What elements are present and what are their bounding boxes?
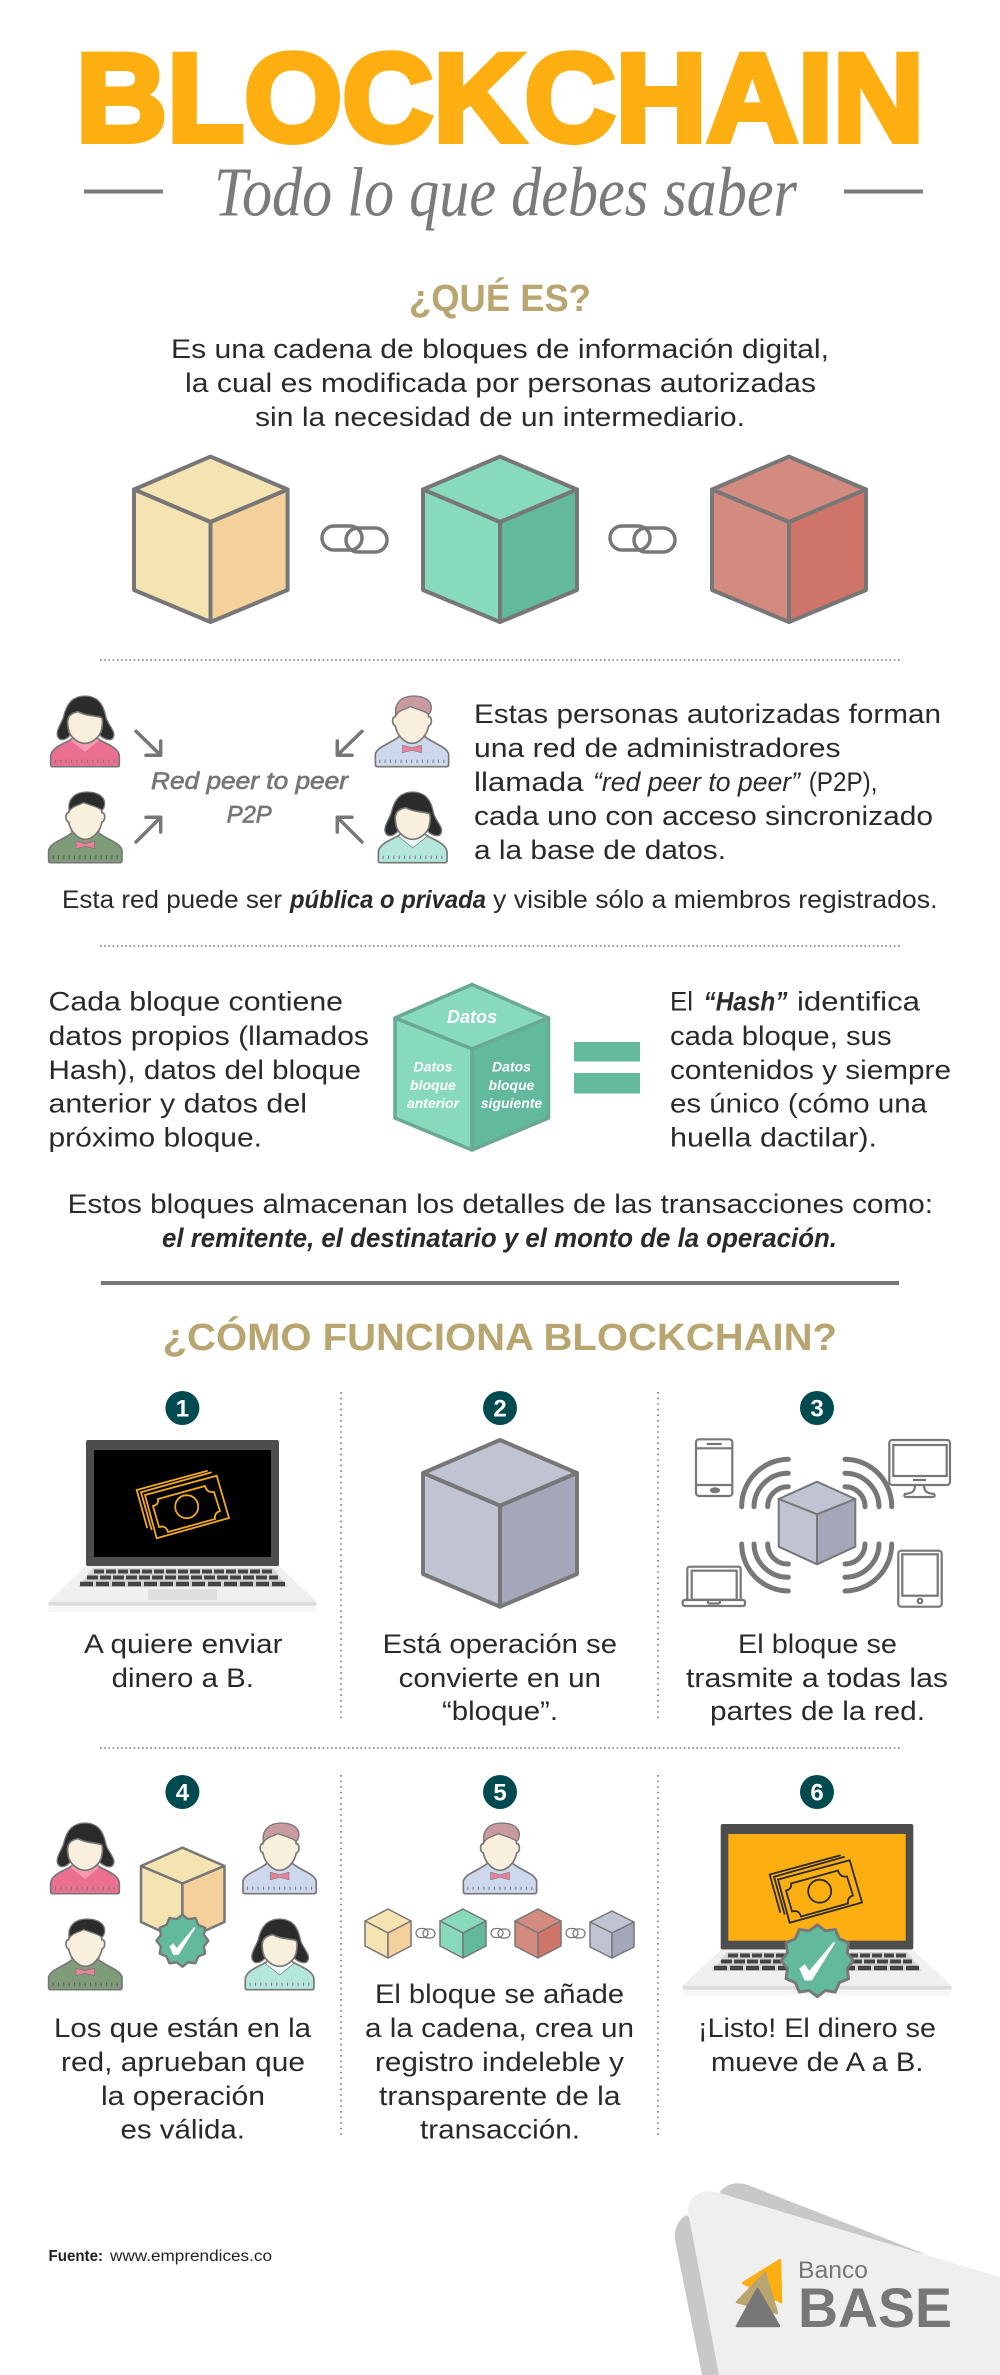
heading: que es: ¿QUÉ ES? <box>409 276 591 320</box>
icon: equals sign <box>574 1042 640 1094</box>
phone <box>696 1439 732 1496</box>
caption: red, aprueban que <box>61 2047 305 2077</box>
caption: la operación <box>101 2081 265 2111</box>
caption: A quiere enviar <box>84 1629 282 1659</box>
source note: www.emprendices.co <box>109 2248 272 2265</box>
number 6 <box>800 1775 834 1809</box>
number 5: 5 <box>493 1780 507 1806</box>
text block: public or private network: pública o privada <box>289 886 486 914</box>
text block: definition: la cual es modificada por personas autorizadas <box>185 368 816 398</box>
number 3: 3 <box>810 1396 824 1422</box>
number 5 <box>483 1775 517 1809</box>
caption: convierte en un <box>399 1663 601 1693</box>
text block: public or private network: y visible sólo a miembros registrados. <box>493 886 938 914</box>
caption <box>698 2013 936 2077</box>
icon: cube broadcasting to devices <box>683 1439 950 1607</box>
icon: chain of four mini cubes <box>365 1909 634 1958</box>
panel: step 3 <box>683 1391 950 1726</box>
text block: block contents: anterior y datos del <box>48 1088 307 1118</box>
text block: hash explanation: El <box>670 987 693 1017</box>
icon: yellow cube <box>141 1848 224 1941</box>
laptop small <box>683 1567 745 1606</box>
text block: hash explanation <box>670 987 951 1152</box>
text block: definition <box>171 334 829 432</box>
text block: p2p explanation: llamada <box>474 767 585 797</box>
text block: block contents: próximo bloque. <box>48 1122 262 1152</box>
title: BLOCKCHAIN <box>76 29 924 168</box>
text block: hash explanation: identifica <box>797 987 921 1017</box>
icon: data cube: siguiente <box>481 1095 542 1111</box>
text block: hash explanation: huella dactilar). <box>670 1122 877 1152</box>
text block: transaction details: Estos bloques almacenan los detalles de las transacciones como: <box>68 1189 933 1219</box>
icon: man green <box>49 792 122 863</box>
icon: data cube: Datos <box>447 1007 497 1027</box>
caption: es válida. <box>120 2115 245 2145</box>
icon: data cube: Datos <box>492 1059 531 1075</box>
caption: transacción. <box>420 2115 580 2145</box>
icon: woman teal <box>378 792 447 863</box>
logo wordmark: Banco <box>798 2257 868 2284</box>
icon: grey cube <box>423 1440 577 1607</box>
icon: data cube: Datos <box>414 1059 453 1075</box>
caption <box>54 2013 312 2145</box>
text block: definition: sin la necesidad de un intermediario. <box>255 402 745 432</box>
signal waves <box>742 1459 892 1591</box>
icon: data cube: bloque <box>489 1077 535 1093</box>
text block: transaction details <box>68 1189 933 1253</box>
text block: definition: Es una cadena de bloques de información digital, <box>171 334 829 364</box>
caption: partes de la red. <box>710 1696 925 1726</box>
small cube <box>779 1482 855 1564</box>
number 4 <box>165 1775 199 1809</box>
number 1 <box>165 1391 199 1425</box>
icon: woman pink <box>51 1823 119 1894</box>
caption: trasmite a todas las <box>686 1663 948 1693</box>
caption: transparente de la <box>379 2081 622 2111</box>
caption: mueve de A a B. <box>711 2047 924 2077</box>
caption: El bloque se añade <box>375 1979 624 2009</box>
icon: green cube <box>423 457 577 622</box>
text block: transaction details: el remitente, el destinatario y el monto de la operación. <box>162 1223 837 1253</box>
number 2 <box>483 1391 517 1425</box>
caption <box>686 1629 948 1726</box>
icon: yellow cube <box>134 457 288 622</box>
heading: como funciona: ¿CÓMO FUNCIONA BLOCKCHAIN? <box>163 1315 837 1359</box>
text block: p2p explanation <box>474 699 941 865</box>
number 6: 6 <box>810 1780 824 1806</box>
icon: banknotes <box>770 1855 862 1923</box>
icon: woman teal <box>245 1919 314 1990</box>
caption: a la cadena, crea un <box>365 2013 634 2043</box>
icon: approval badge <box>781 1925 853 1997</box>
text block: hash explanation: “Hash” <box>704 987 788 1017</box>
icon: data cube: anterior <box>407 1095 461 1111</box>
number 3 <box>800 1391 834 1425</box>
source note <box>48 2248 272 2265</box>
panel: step 5 <box>365 1775 634 2145</box>
caption: El bloque se <box>738 1629 897 1659</box>
text block: hash explanation: contenidos y siempre <box>670 1055 951 1085</box>
text block: p2p explanation: cada uno con acceso sincronizado <box>474 801 933 831</box>
logo corner: banco base <box>675 2183 1000 2375</box>
text block: public or private network <box>62 886 938 914</box>
text block: block contents: datos propios (llamados <box>48 1021 369 1051</box>
icon: logo triangles <box>737 2260 781 2326</box>
text block: p2p explanation: (P2P), <box>809 767 878 797</box>
caption: “bloque”. <box>442 1696 558 1726</box>
caption: ¡Listo! El dinero se <box>698 2013 936 2043</box>
icon: man blue <box>375 696 449 767</box>
subtitle with side rules: Todo lo que debes saber <box>214 154 798 232</box>
icon: woman pink <box>51 696 119 767</box>
icon: laptop with money and check badge <box>682 1824 952 1997</box>
text block: block contents: Hash), datos del bloque <box>48 1055 361 1085</box>
text block: hash explanation: cada bloque, sus <box>670 1021 892 1051</box>
number 2: 2 <box>493 1396 507 1422</box>
icon: man blue <box>463 1823 537 1894</box>
text block: block contents: Cada bloque contiene <box>48 987 343 1017</box>
label: red peer to peer: Red peer to peer <box>151 768 349 795</box>
caption: Está operación se <box>383 1629 617 1659</box>
text block: hash explanation: es único (cómo una <box>670 1088 928 1118</box>
icon: man green <box>49 1919 122 1990</box>
arrows toward the network label <box>136 731 362 842</box>
monitor <box>889 1440 950 1497</box>
icon: red cube <box>712 457 866 622</box>
text block: p2p explanation: Estas personas autorizadas forman <box>474 699 941 729</box>
caption <box>84 1629 282 1693</box>
caption: registro indeleble y <box>375 2047 625 2077</box>
text block: block contents <box>48 987 369 1152</box>
label: red peer to peer: P2P <box>227 802 272 829</box>
panel: step 6 <box>682 1775 952 2077</box>
text block: p2p explanation: a la base de datos. <box>474 835 726 865</box>
text block: p2p explanation: “red peer to peer” <box>593 767 801 797</box>
tablet <box>898 1551 942 1607</box>
panel: step 1 <box>48 1391 317 1693</box>
icon: data cube: bloque <box>410 1077 456 1093</box>
icon: laptop with money <box>48 1440 317 1612</box>
caption <box>365 1979 634 2145</box>
label: red peer to peer <box>151 768 349 829</box>
icon: data cube <box>395 984 548 1150</box>
peer to peer network diagram <box>49 696 449 863</box>
icon: man blue <box>243 1823 316 1894</box>
number 1: 1 <box>176 1396 189 1422</box>
source note: Fuente: <box>48 2248 103 2265</box>
chain of three cubes <box>134 457 866 622</box>
icon: chain link 2 <box>610 526 675 552</box>
panel: step 2 <box>383 1391 617 1726</box>
caption <box>383 1629 617 1726</box>
logo wordmark: BASE <box>798 2276 952 2339</box>
icon: approval badge <box>156 1915 208 1967</box>
icon: chain link 1 <box>322 526 387 552</box>
caption: Los que están en la <box>54 2013 312 2043</box>
number 4: 4 <box>176 1780 190 1806</box>
icon: banknotes <box>137 1471 229 1538</box>
text block: public or private network: Esta red puede ser <box>62 886 282 914</box>
caption: dinero a B. <box>112 1663 254 1693</box>
text block: p2p explanation: una red de administradores <box>474 733 841 763</box>
panel: step 4 <box>49 1775 316 2145</box>
